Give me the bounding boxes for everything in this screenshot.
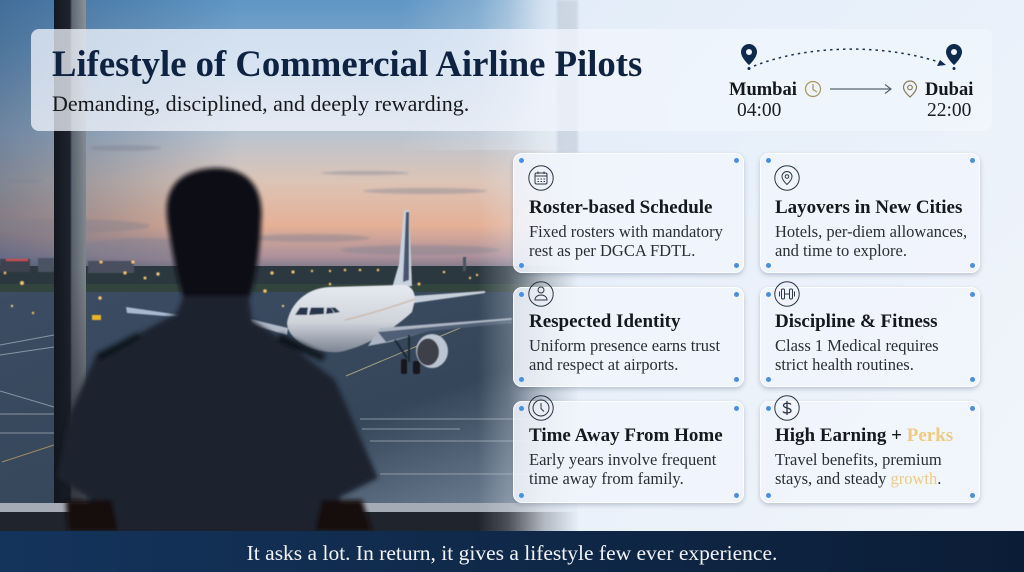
- heading: High Earning + Perks: [775, 425, 953, 446]
- description: Class 1 Medical requires: [775, 336, 939, 355]
- icon: person: [528, 281, 554, 307]
- card: Time Away From Home: [513, 401, 744, 503]
- icon: origin pin: [741, 44, 757, 70]
- description: Fixed rosters with mandatory: [529, 222, 723, 241]
- header panel: [31, 29, 742, 131]
- description: and time to explore.: [775, 241, 907, 260]
- description: rest as per DGCA FDTL.: [529, 241, 695, 260]
- window frame: [0, 0, 600, 531]
- icon: location: [774, 165, 800, 191]
- description: time away from family.: [529, 469, 684, 488]
- heading: Respected Identity: [529, 311, 680, 332]
- description: [529, 336, 720, 374]
- heading: Discipline & Fitness: [775, 311, 938, 332]
- Dubai label: Dubai: [925, 80, 973, 100]
- description: Early years involve frequent: [529, 450, 716, 469]
- route graphic: Mumbai to Dubai: [729, 44, 974, 121]
- subtitle: Demanding, disciplined, and deeply rewarding.: [52, 91, 469, 116]
- heading: Layovers in New Cities: [775, 197, 962, 218]
- card: Respected Identity: [513, 287, 744, 387]
- runway markings: [0, 328, 560, 474]
- icon: clock: [528, 395, 554, 421]
- description: and respect at airports.: [529, 355, 678, 374]
- icon: calendar: [528, 165, 554, 191]
- description: [529, 450, 716, 488]
- description: strict health routines.: [775, 355, 914, 374]
- description: [775, 336, 939, 374]
- description: [775, 222, 967, 260]
- heading: Roster-based Schedule: [529, 197, 712, 218]
- card: Layovers in New Cities: [760, 153, 980, 273]
- heading: Time Away From Home: [529, 425, 723, 446]
- arrow: [830, 84, 891, 94]
- icon: dumbbell: [774, 281, 800, 307]
- title: Lifestyle of Commercial Airline Pilots: [52, 43, 642, 84]
- icon: clock: [806, 82, 820, 96]
- icon: dollar: [774, 395, 800, 421]
- footer tagline: It asks a lot. In return, it gives a lifestyle few ever experience.: [247, 541, 777, 565]
- card: Roster-based Schedule: [513, 153, 744, 273]
- Mumbai label: Mumbai: [729, 80, 797, 100]
- card: High Earning + Perks: [760, 401, 980, 503]
- distant terminal buildings and lights: [0, 257, 478, 320]
- airliner: [126, 210, 512, 374]
- dashed flight arc: [754, 49, 946, 66]
- Mumbai time: 04:00: [737, 100, 781, 121]
- right side light wash: [478, 0, 578, 531]
- icon: destination pin: [946, 44, 962, 70]
- Dubai time: 22:00: [927, 100, 971, 121]
- description: [775, 450, 942, 488]
- pilot silhouette from behind: [57, 168, 378, 531]
- icon: location pin: [904, 81, 916, 97]
- description: Hotels, per-diem allowances,: [775, 222, 967, 241]
- description: Travel benefits, premium: [775, 450, 942, 469]
- description: stays, and steady growth.: [775, 469, 941, 488]
- description: Uniform presence earns trust: [529, 336, 720, 355]
- description: [529, 222, 723, 260]
- card: Discipline & Fitness: [760, 287, 980, 387]
